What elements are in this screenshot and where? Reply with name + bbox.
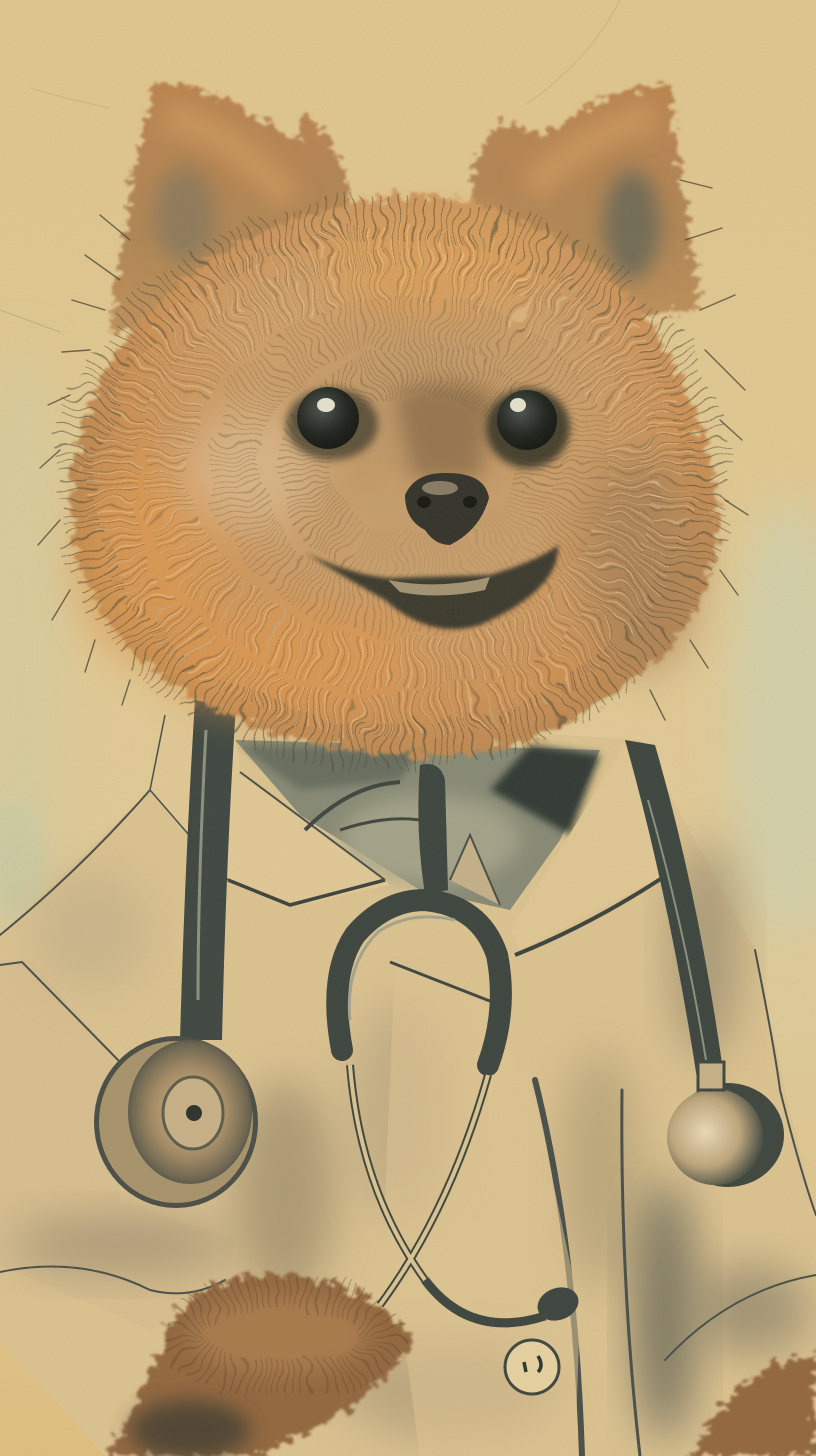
yoke arch	[337, 900, 501, 1065]
left eye	[286, 387, 378, 460]
head fur mass	[72, 195, 718, 758]
left tube	[180, 700, 236, 1040]
radial fur texture	[77, 217, 707, 747]
right eye	[486, 388, 570, 468]
centre stem	[418, 764, 448, 895]
right chest piece	[667, 1062, 784, 1187]
left chest piece	[94, 1036, 258, 1208]
thin cross tubes	[350, 1065, 488, 1305]
nose	[405, 473, 489, 545]
muzzle pale area	[340, 473, 540, 597]
button	[505, 1340, 559, 1394]
right tube	[625, 740, 725, 1085]
dog head	[38, 80, 748, 758]
coat outlines	[0, 790, 816, 1456]
tip	[533, 1282, 583, 1326]
stethoscope	[94, 700, 784, 1326]
shadow under jaw	[305, 545, 558, 629]
dark bridge of the nose	[395, 382, 495, 480]
right paw	[690, 1356, 816, 1456]
coat shading	[0, 960, 235, 1330]
right lapel	[510, 745, 665, 950]
left ear	[110, 80, 350, 340]
left lapel	[150, 715, 390, 905]
warm orange highlights	[310, 220, 550, 310]
coat body	[0, 710, 816, 1456]
shirt and collar	[150, 715, 665, 1456]
lab coat	[0, 710, 816, 1456]
stray whiskers	[38, 180, 748, 720]
left paw	[105, 1275, 415, 1456]
coat front panel	[385, 960, 580, 1456]
right ear	[470, 85, 700, 330]
